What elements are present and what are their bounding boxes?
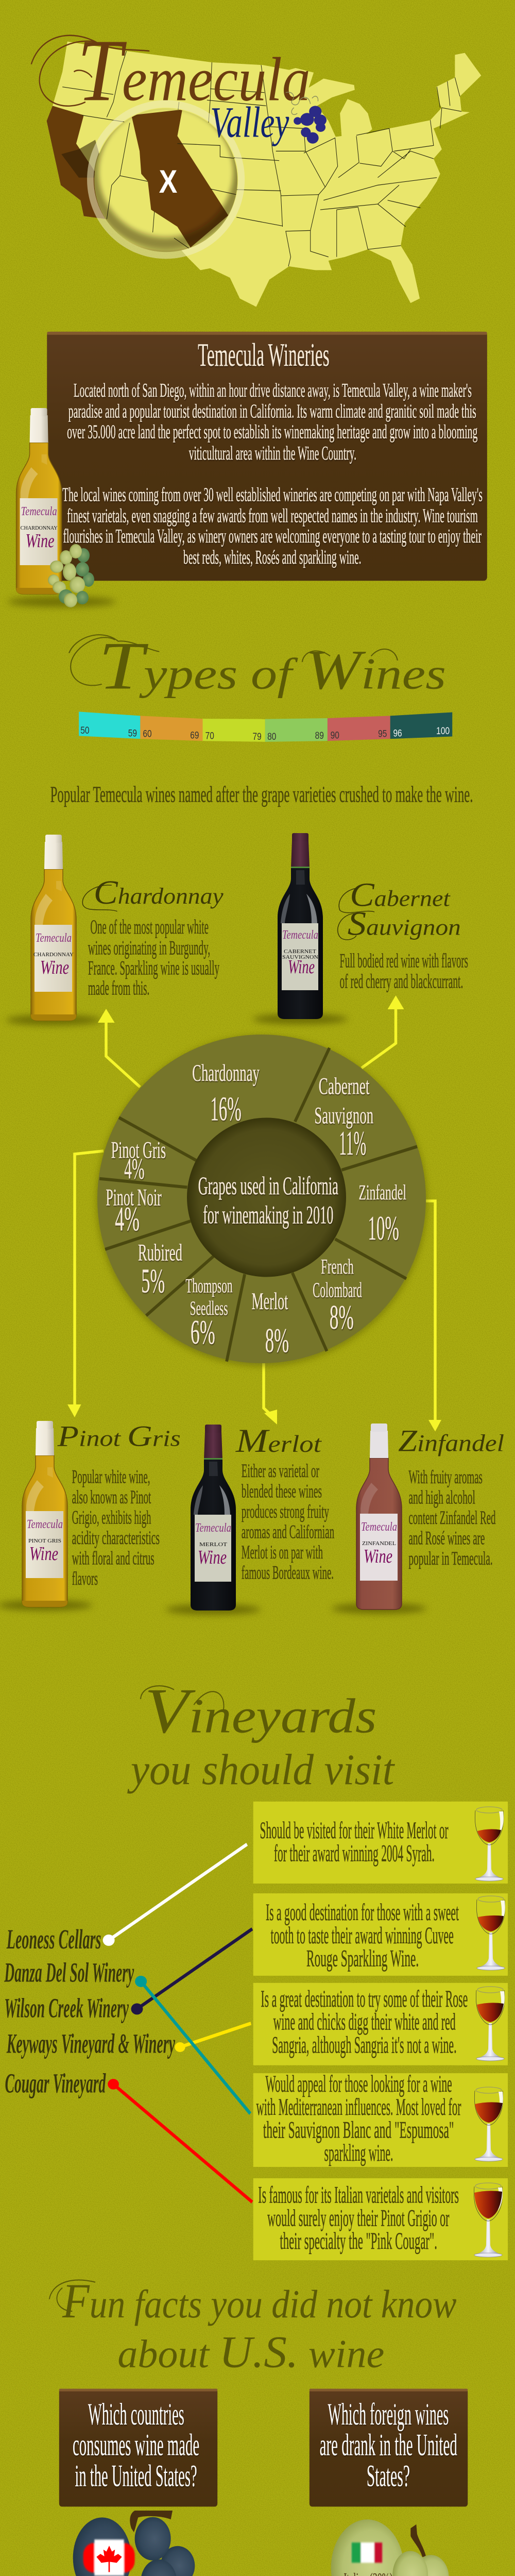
section: vineyards you should visit [4,1676,508,2202]
Chardonnay description [88,916,219,999]
location marker X: X [159,163,177,200]
Cabernet Sauvignon heading: Cabernet [350,876,451,914]
legend bar: rating scale: 95 [378,728,387,739]
bottle: Pinot Gris [0,1421,92,1611]
Pinot Gris description: Grigio, exhibits high [72,1506,151,1528]
hero wine bottle with grapes: Wine [26,530,55,552]
section: types of wines intro: One of the most popular white [90,916,209,938]
pie labels: 6% [191,1313,215,1351]
icon: wine glass 2 [476,1896,505,1970]
Pinot Gris heading: Pinot Gris [57,1420,181,1453]
Cabernet Sauvignon heading [338,876,461,943]
heading: Types of Wines: Types of Wines [98,629,446,704]
arrow: pie to Chardonnay [98,1009,140,1087]
green grape bunch: foreign wines drunk in the US [331,2519,487,2576]
vineyard names: Danza Del Sol Winery [4,1957,134,1988]
grape berries [331,2519,487,2576]
panel heading: Temecula Wineries [198,336,330,373]
Pinot Gris description: also known as Pinot [72,1486,151,1507]
legend bar: rating scale: 60 [143,728,152,739]
pie labels: Pinot Noir [106,1183,162,1211]
question box: right [310,2389,468,2506]
section: wine descriptions lower row [57,1420,504,1589]
pie chart: grapes used in California [97,1035,426,1366]
legend bar: rating scale: 69 [190,730,199,741]
bottle: Merlot [166,1425,261,1615]
heading: Vineyards you should visit: Vineyards [145,1676,377,1747]
legend bar: rating scale: 96 [393,728,402,739]
legend bar: rating scale: 100 [436,725,450,737]
legend bar: rating scale: 80 [267,731,276,742]
pie labels: 10% [368,1210,399,1248]
Merlot heading: Merlot [235,1422,322,1459]
bottle: Zinfandel: Wine [364,1546,392,1567]
heading: Vineyards you should visit [127,1676,395,1794]
bottle: Zinfandel: ZINFANDEL [362,1540,396,1547]
pie centre: for winemaking in 2010 [203,1201,333,1229]
question box: left: consumes wine made [73,2428,199,2462]
panel body text [62,379,483,568]
bottle: Cabernet Sauvignon: CABERNET [284,948,316,955]
pie labels: Thompson [185,1275,233,1297]
pie labels [106,1059,406,1360]
vineyard names: Cougar Vineyard [5,2067,106,2098]
bottle: Cabernet Sauvignon [253,833,348,1024]
Pinot Gris description: with floral and citrus [72,1547,154,1569]
legend bar: rating scale: 79 [252,731,262,742]
panel: Temecula Wineries [47,332,487,581]
legend bar: rating scale [79,711,452,742]
vineyard names: Wilson Creek Winery [4,1993,129,2023]
bottle: Chardonnay [6,835,101,1025]
Cabernet description [339,949,468,992]
bottle: Pinot Gris: PINOT GRIS [28,1538,61,1544]
icon: wine glass 4 [474,2087,503,2161]
legend bar: rating scale: 59 [128,728,137,739]
legend bar: rating scale: 70 [205,731,214,741]
hero wine bottle with grapes: Temecula [21,505,57,518]
Merlot description: produces strong fruity [242,1500,329,1522]
vineyard names: Leoness Cellars [6,1924,101,1955]
Pinot Gris description: flavors [72,1567,98,1589]
pie labels: 11% [339,1124,366,1162]
bottle: Cabernet Sauvignon: SAUVIGNON [282,954,318,960]
flag: Canada [83,2539,135,2575]
pie labels: 8% [265,1321,289,1360]
description boxes [253,1802,508,2167]
panel body text: viticultural area within the Wine Country. [189,442,356,464]
hero wine bottle with grapes [8,408,116,607]
question box: left [59,2389,217,2506]
icon: grape bunch logo [286,92,327,144]
Merlot description: aromas and Californian [242,1521,334,1543]
bottle: Chardonnay: CHARDONNAY [33,952,74,958]
Merlot description: blended these wines [242,1480,322,1502]
Merlot description: Either as varietal or [242,1460,319,1481]
legend bar: rating scale: 50 [80,725,89,736]
pie centre [187,1118,346,1277]
bottle: Chardonnay: Temecula [36,931,72,945]
blue grape bunch: countries consuming US wine [52,2511,214,2576]
panel body text: best reds, whites, Rosés and sparkling wine. [183,546,362,568]
pie labels: Cabernet [319,1073,370,1099]
arrow: pie to Pinot Gris [67,1151,104,1417]
Chardonnay description: made from this. [88,977,149,999]
section: types of wines intro [50,629,473,999]
pie separators [99,1048,417,1362]
vineyard 3 description [261,1985,468,2058]
pie labels: 5% [141,1262,165,1300]
connector lines [103,1844,252,2202]
bottle: Pinot Gris: Temecula [27,1518,63,1531]
stem [410,2524,426,2557]
bottle: Merlot: Temecula [195,1521,231,1535]
Pinot Gris description: acidity characteristics [72,1527,160,1548]
arrow: pie to Zinfandel [426,1201,441,1431]
pie labels: Merlot [252,1287,288,1314]
vineyard 1 description [260,1817,449,1867]
Cabernet Sauvignon heading: Sauvignon [348,905,461,943]
question box: right: States? [367,2459,410,2494]
Pinot Gris description [72,1466,160,1589]
pie centre: Grapes used in California [198,1172,338,1200]
Chardonnay heading: Chardonnay [94,874,224,911]
vineyard names [4,1924,175,2098]
stem [130,2511,173,2532]
pie labels: Pinot Gris [111,1137,166,1163]
Zinfandel description [408,1466,495,1569]
arrow: pie to Cabernet [362,995,404,1068]
vineyard names: Keyways Vineyard & Winery [6,2028,175,2059]
Zinfandel heading: Zinfandel [398,1423,504,1458]
map of the United States [47,42,481,307]
vineyard 5 box [253,2178,508,2260]
pie labels: French [321,1255,354,1278]
pie labels: 16% [210,1090,242,1128]
heading: Fun facts you did not know about U.S. wine: about U.S. wine [117,2327,384,2377]
icon: wine glass 3 [476,1987,505,2061]
icon: wine glass 5 [474,2183,503,2257]
section: types of wines intro: wines originating in Burgundy, [88,937,210,959]
bottle: Chardonnay: Wine [40,957,69,978]
pie labels: Rubired [138,1239,182,1266]
pie labels: 4% [124,1153,145,1185]
pie labels: Colombard [313,1278,362,1302]
bottle: Zinfandel: Temecula [361,1520,397,1534]
section: types of wines intro: France. Sparkling wine is usually [88,957,219,979]
pie labels: Zinfandel [358,1180,406,1204]
legend bar: rating scale: 90 [331,730,339,741]
bottle: Cabernet Sauvignon: Wine [288,956,315,978]
question box: left: Which countries [88,2398,184,2432]
heading: Fun facts you did not know about U.S. wine [49,2274,457,2377]
flag: Italy [352,2543,382,2563]
question box: left: in the United States? [75,2459,197,2494]
Merlot description: famous Bordeaux wine. [242,1562,334,1583]
magnifying lens over California [90,100,242,257]
arrow: pie to Merlot [264,1363,277,1425]
hero: US map with lens and title [31,21,481,307]
heading: Fun facts you did not know about U.S. wine: Fun facts you did not know [62,2274,457,2328]
heading: Vineyards you should visit: you should visit [127,1746,395,1794]
legend bar: rating scale: 89 [315,730,324,741]
title: Temecula: Temecula [77,21,311,120]
pie labels: Chardonnay [192,1059,260,1086]
Merlot description [242,1460,334,1583]
bottle: Pinot Gris: Wine [29,1543,58,1565]
subtitle: Valley: Valley [210,99,289,147]
vineyard 2 description: Rouge Sparkling Wine. [306,1945,419,1972]
pie labels: 4% [115,1200,140,1239]
grape berries [52,2517,214,2576]
vineyard 2 description [266,1899,459,1972]
vineyard 4 description: sparkling wine. [324,2140,393,2166]
Pinot Gris description: Popular white wine, [72,1466,150,1487]
pie labels: Sauvignon [314,1102,373,1129]
pie labels: Seedless [190,1297,228,1319]
bottle: Cabernet Sauvignon: Temecula [282,928,318,942]
bottle: Merlot: MERLOT [199,1541,227,1548]
vineyard 4 description [256,2070,461,2166]
pie labels: 8% [330,1299,354,1336]
bottle: Zinfandel [332,1423,426,1614]
icon: wine glass 1 [475,1807,504,1881]
hero wine bottle with grapes: CHARDONNAY [21,525,58,531]
section: fun facts [49,2274,468,2506]
bottle: Merlot: Wine [198,1547,227,1568]
Merlot description: Merlot is on par with [242,1541,323,1563]
